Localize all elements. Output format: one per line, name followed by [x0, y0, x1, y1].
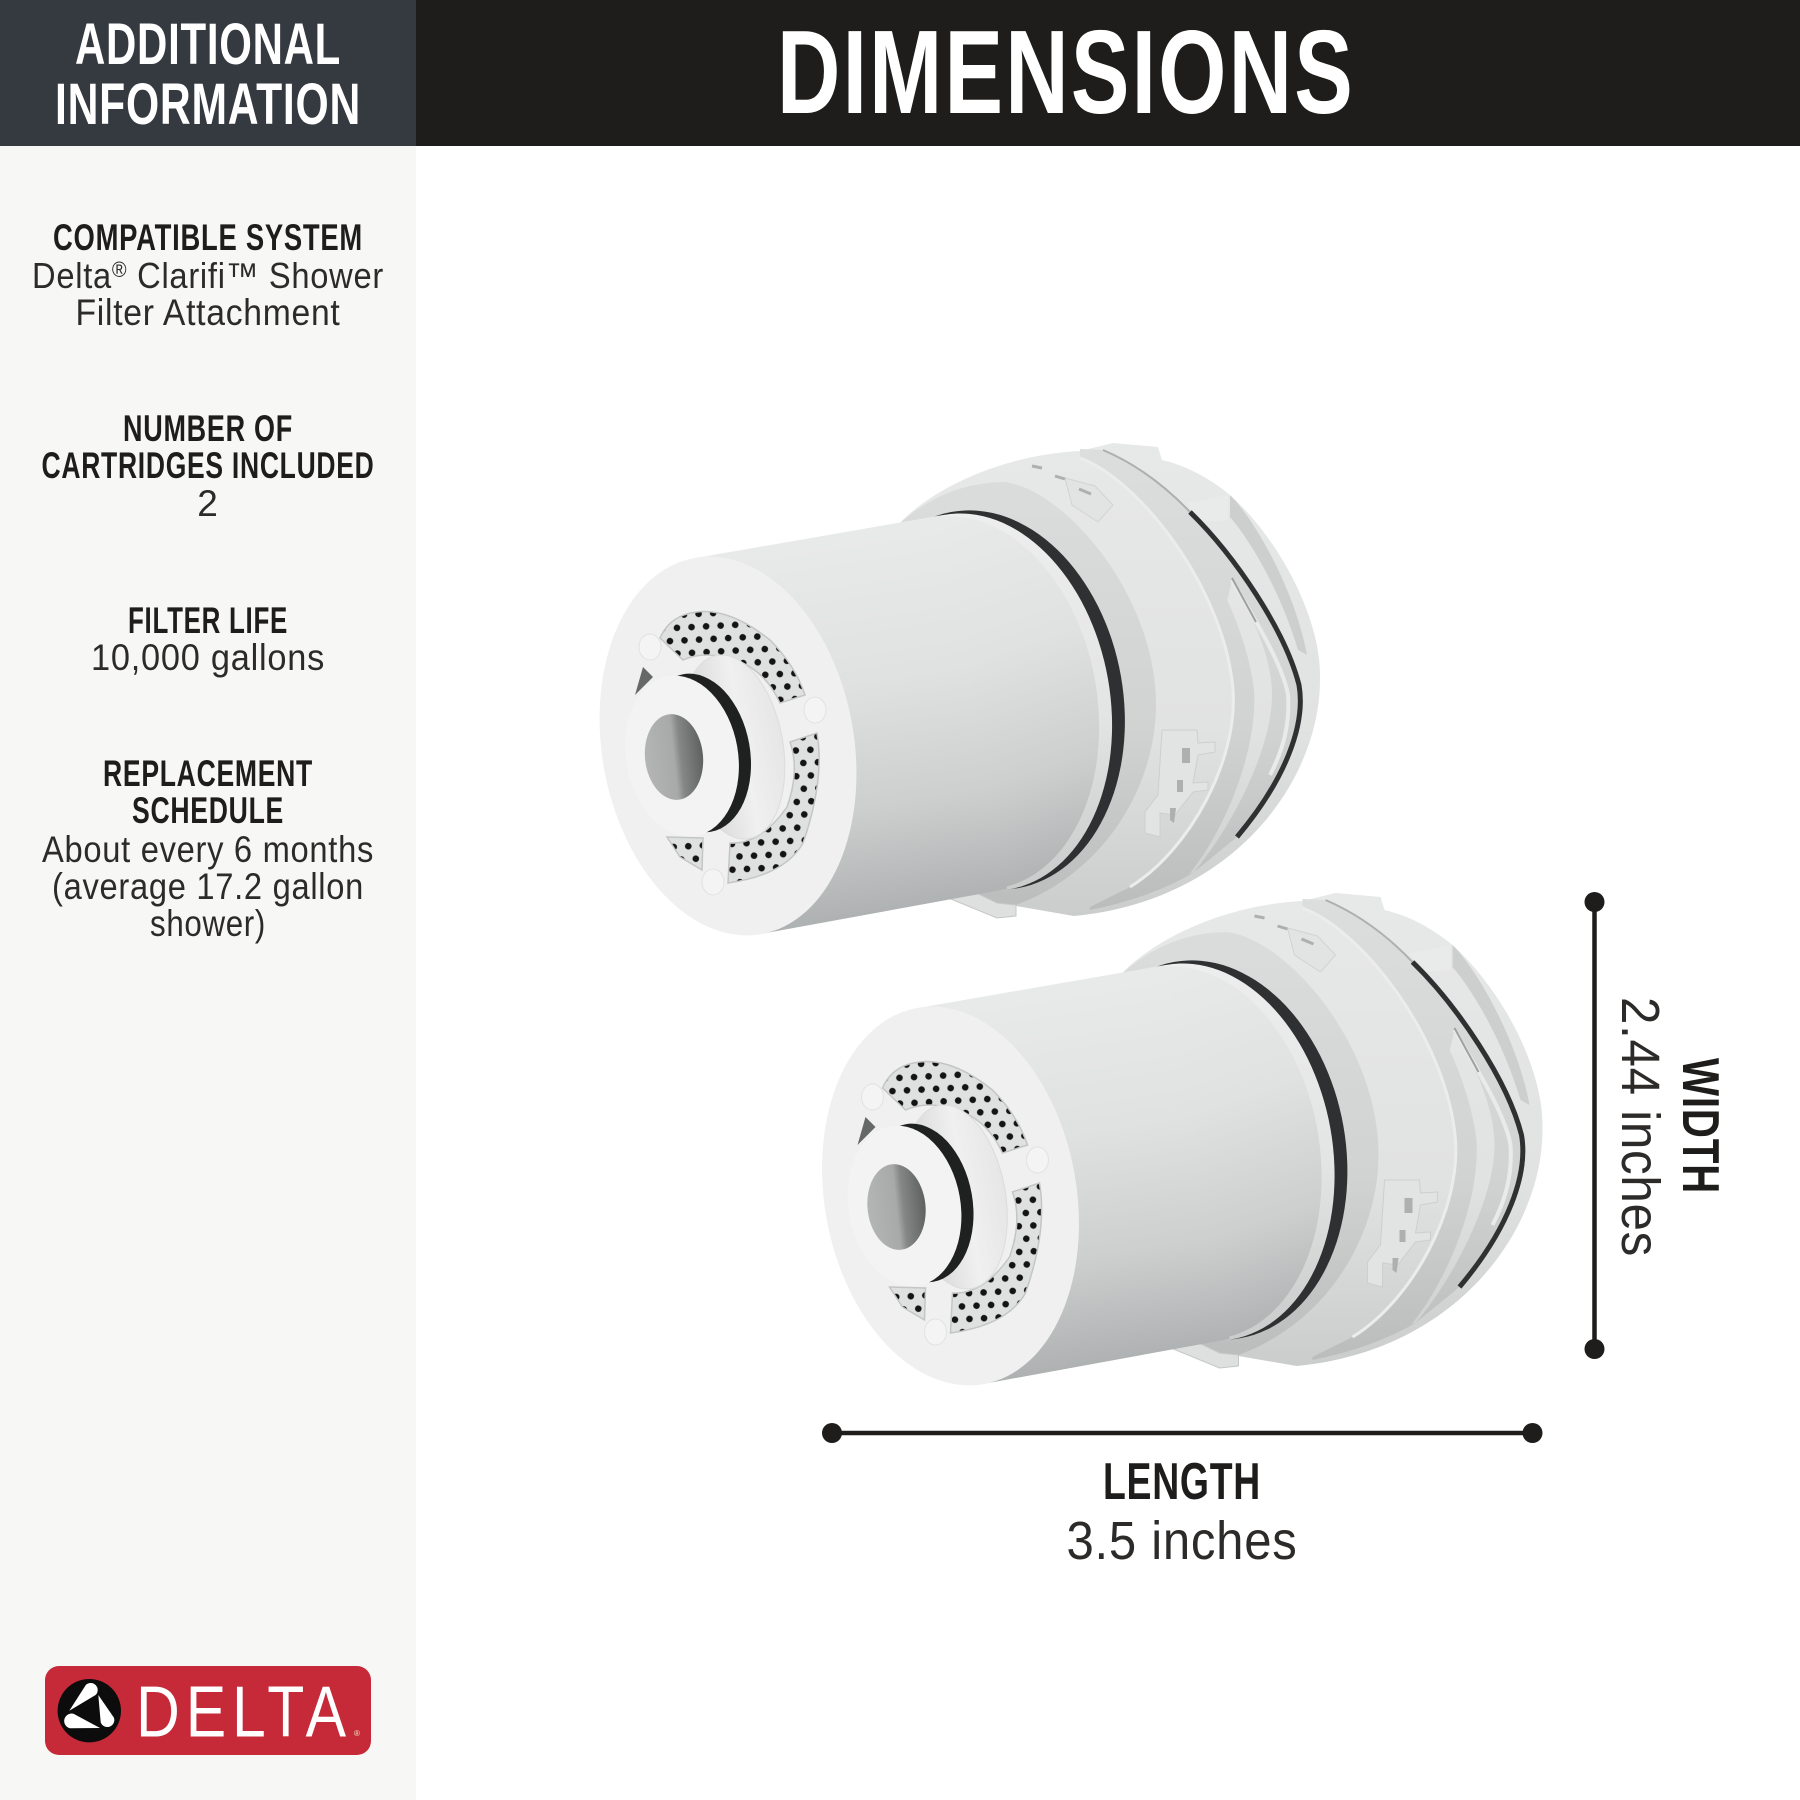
text block: filter life: 10,000 gallons [91, 637, 325, 678]
text block: number of cartridges: CARTRIDGES INCLUDED [42, 445, 374, 486]
bumps [639, 634, 661, 660]
rear rim channel [1230, 495, 1307, 655]
rear black seal [1190, 512, 1300, 837]
logo: delta: ® [354, 1729, 360, 1738]
text block: number of cartridges [42, 408, 374, 524]
text block: compatible system: Filter Attachment [76, 292, 340, 333]
text block: replacement schedule: About every 6 months [42, 829, 374, 870]
heading: additional information: ADDITIONAL [75, 12, 341, 77]
text block: filter life [91, 600, 325, 678]
label: width [1610, 997, 1729, 1257]
ridge [1150, 580, 1272, 880]
text block: compatible system [32, 217, 384, 333]
text block: filter life: FILTER LIFE [128, 600, 288, 641]
dimension arrow: width [1584, 892, 1604, 1359]
panel: sidebar header [0, 0, 416, 146]
side clip [1145, 730, 1215, 837]
bore [641, 711, 707, 803]
product: filter cartridge bottom [793, 893, 1543, 1406]
text block: replacement schedule: SCHEDULE [132, 790, 284, 831]
inner darker band [898, 482, 1156, 905]
label: length: 3.5 inches [1066, 1511, 1298, 1571]
panel: dimensions header [416, 0, 1800, 146]
text block: replacement schedule [42, 753, 374, 944]
broad flange [898, 458, 1233, 912]
label: width: 2.44 inches [1610, 997, 1670, 1257]
heading: additional information [55, 12, 361, 137]
text block: compatible system: ® [112, 257, 127, 282]
text block: compatible system: COMPATIBLE SYSTEM [53, 217, 363, 258]
logo: delta: DELTA [136, 1673, 352, 1753]
front face [571, 536, 885, 956]
heading: additional information: INFORMATION [55, 72, 361, 137]
o-ring [816, 488, 1154, 912]
dimension arrow: length [822, 1423, 1542, 1443]
top clip marks [1032, 466, 1113, 522]
text block: number of cartridges: 2 [197, 483, 219, 524]
label: width: WIDTH [1671, 1058, 1729, 1194]
label: length: LENGTH [1103, 1453, 1261, 1511]
label: length [1066, 1453, 1298, 1571]
text block: compatible system: Delta [32, 255, 120, 296]
text block: replacement schedule: REPLACEMENT [103, 753, 313, 794]
logo: delta [45, 1666, 371, 1755]
text block: compatible system: Clarifi™ Shower [127, 255, 384, 296]
band inside rear seal [1080, 449, 1300, 910]
collar [668, 647, 798, 847]
panel: additional information sidebar [0, 146, 416, 1800]
text block: number of cartridges: NUMBER OF [123, 408, 293, 449]
product: filter cartridge top [571, 443, 1320, 956]
bottom tab [946, 885, 1016, 918]
second band [1080, 451, 1254, 910]
perforated openings [660, 612, 805, 703]
text block: replacement schedule: shower) [150, 903, 266, 944]
rear housing silhouette [898, 443, 1320, 916]
text block: replacement schedule: (average 17.2 gallon [52, 866, 364, 907]
cylinder body [696, 492, 1141, 934]
title: dimensions: DIMENSIONS [777, 6, 1355, 139]
